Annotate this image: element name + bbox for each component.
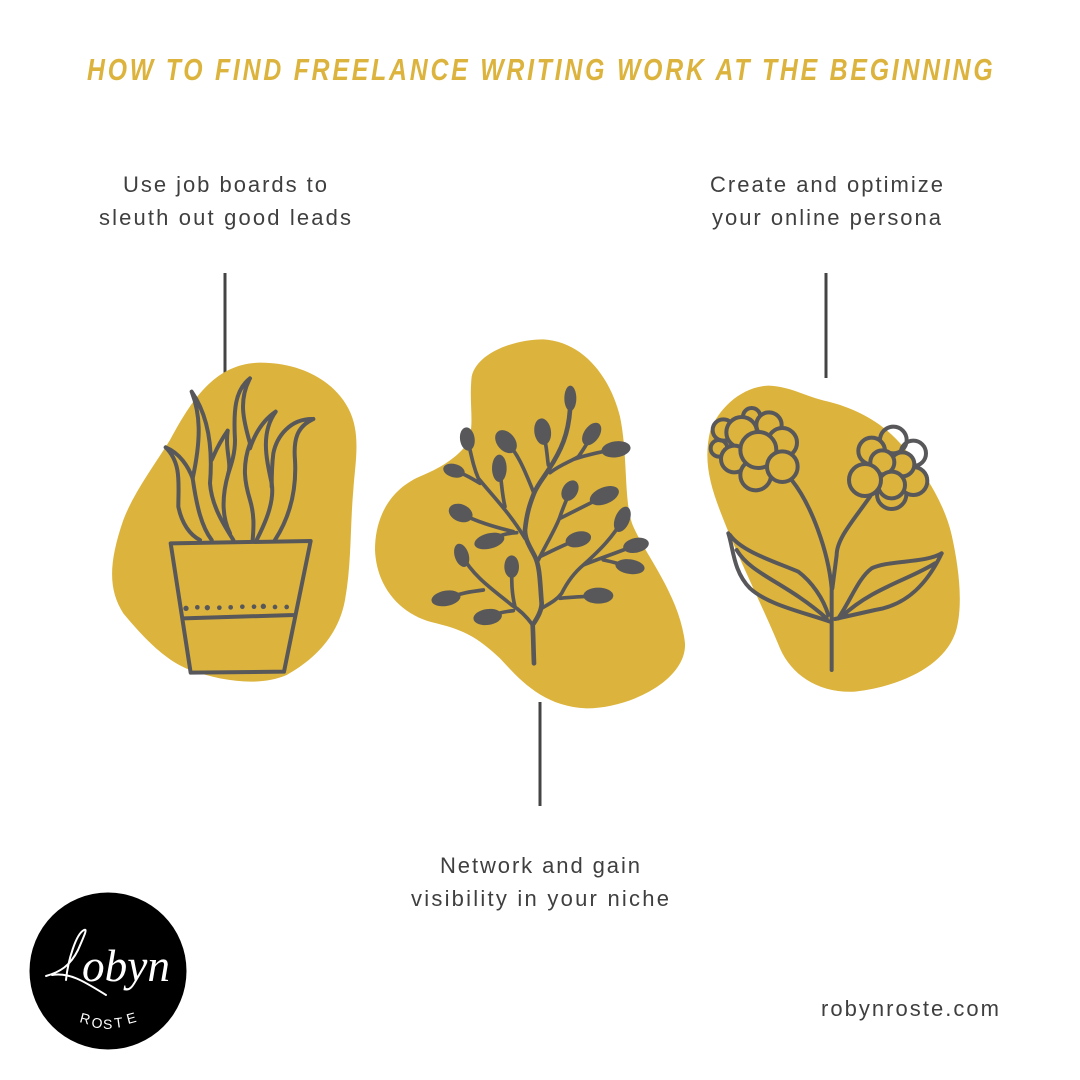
icon: flowers on blob: [707, 386, 960, 692]
connector line: left: [224, 273, 226, 373]
title: HOW TO FIND FREELANCE WRITING WORK AT THE BEGINNING: [87, 52, 993, 87]
text: network: [411, 853, 669, 911]
text: network: visibility in your niche: [411, 886, 669, 911]
icon: branch on blob: [375, 339, 685, 708]
text: online persona: [710, 172, 943, 230]
text: job boards: [99, 172, 351, 230]
text: online persona: your online persona: [712, 205, 942, 230]
logo: signature: obyn: [82, 940, 170, 991]
logo: [30, 892, 186, 1050]
text: network: Network and gain: [440, 853, 640, 878]
connector line: centre: [538, 702, 542, 806]
logo: flourish: [46, 930, 106, 995]
logo: roste: ROSTE: [78, 1009, 138, 1032]
text: job boards: sleuth out good leads: [99, 205, 351, 230]
connector line: right: [824, 273, 828, 378]
text: job boards: Use job boards to: [123, 172, 327, 197]
icon: potted plant on blob: [112, 363, 356, 682]
text: online persona: Create and optimize: [710, 172, 943, 197]
text: website: robynroste.com: [821, 996, 999, 1021]
